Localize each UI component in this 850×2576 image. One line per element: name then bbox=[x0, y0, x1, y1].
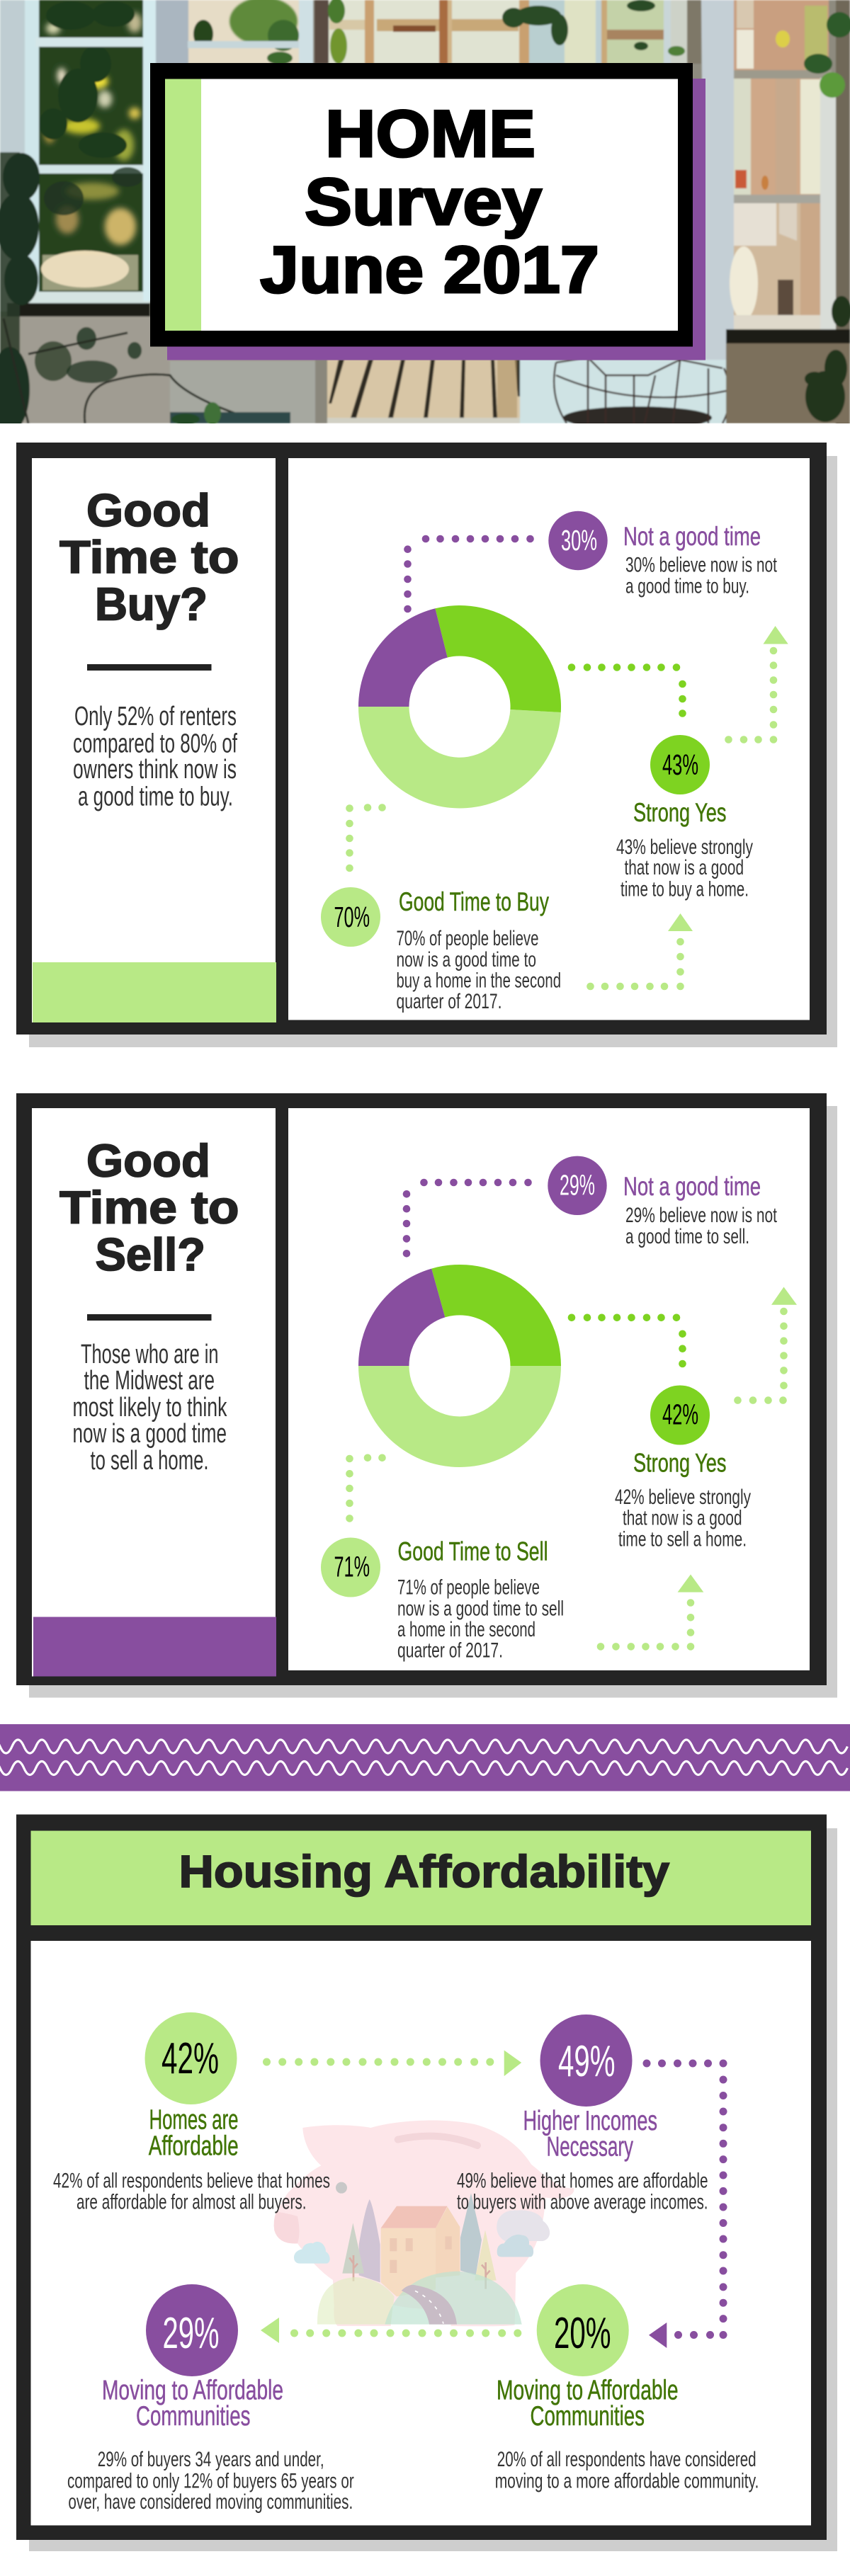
dotted connector: light green bbox=[346, 1454, 386, 1522]
stat: 43% strong yes: 43% believe strongly bbox=[616, 836, 753, 859]
stat: 49% higher incomes necessary: Necessary bbox=[547, 2132, 633, 2162]
heading: Sell? bbox=[95, 1229, 205, 1280]
stat: 43% strong yes: that now is a good bbox=[625, 856, 744, 879]
stat: 49% higher incomes necessary: 49% bbox=[558, 2037, 615, 2086]
stat: 29% moving to affordable communities bbox=[67, 2284, 354, 2514]
stat: 49% higher incomes necessary bbox=[457, 2014, 708, 2213]
stat: 30% not a good time: 30% believe now is not bbox=[625, 554, 777, 576]
stat: 29% moving to affordable communities: 29% of buyers 34 years and under, bbox=[98, 2448, 324, 2471]
stat: 42% homes are affordable: Homes are bbox=[149, 2104, 238, 2136]
side text: to sell a home. bbox=[91, 1446, 208, 1476]
stat: 30% not a good time bbox=[548, 511, 777, 598]
stat: 30% not a good time: 30% bbox=[561, 524, 597, 557]
wavy banner bbox=[0, 1724, 850, 1791]
side text: the Midwest are bbox=[84, 1366, 215, 1396]
side text: Those who are in bbox=[81, 1340, 218, 1369]
heading: Time to bbox=[60, 1181, 239, 1233]
side text: compared to 80% of bbox=[73, 729, 237, 759]
panel: Good Time to Buy bbox=[16, 443, 837, 1047]
panel shadow bbox=[29, 1106, 837, 1698]
dotted connector: dark green bbox=[568, 1314, 686, 1367]
side text bbox=[73, 702, 237, 811]
hero photo: garden house windows bbox=[0, 0, 850, 432]
right column bbox=[288, 458, 810, 1020]
arrow: upper right bbox=[725, 626, 788, 743]
stat: 70% good time to buy: buy a home in the second bbox=[397, 969, 561, 993]
stat: 29% not a good time: 29% bbox=[560, 1168, 595, 1201]
stat: 30% not a good time: a good time to buy. bbox=[625, 575, 749, 598]
title card bbox=[150, 63, 706, 360]
dotted connector: light green bbox=[346, 804, 386, 872]
right column bbox=[288, 1108, 810, 1670]
stat: 43% strong yes bbox=[616, 735, 753, 901]
title: HOME bbox=[325, 96, 536, 171]
stat: 71% good time to sell: 71% of people believe bbox=[397, 1575, 540, 1599]
stat: 49% higher incomes necessary: Higher Incomes bbox=[523, 2106, 657, 2136]
donut chart bbox=[358, 605, 561, 808]
stat: 43% strong yes: 43% bbox=[662, 748, 698, 781]
stat: 29% not a good time: Not a good time bbox=[623, 1172, 761, 1201]
heading: Time to bbox=[60, 531, 239, 583]
left column bbox=[32, 1108, 276, 1677]
stat: 71% good time to sell: a home in the second bbox=[397, 1618, 536, 1641]
panel: Housing Affordability bbox=[16, 1814, 837, 2551]
heading: Good bbox=[86, 1134, 210, 1187]
title: June 2017 bbox=[260, 232, 599, 307]
body area bbox=[31, 1941, 811, 2525]
stat: 42% strong yes: 42% bbox=[662, 1398, 698, 1430]
panel shadow bbox=[29, 456, 837, 1047]
stat: 71% good time to sell: Good Time to Sell bbox=[398, 1537, 548, 1566]
stat: 70% good time to buy: 70% of people believe bbox=[397, 927, 538, 950]
header bar bbox=[31, 1831, 811, 1925]
black frame bbox=[150, 63, 693, 347]
side text bbox=[72, 1340, 227, 1476]
stat: 70% good time to buy: Good Time to Buy bbox=[399, 887, 549, 916]
heading bbox=[60, 1134, 239, 1280]
illustration: piggy bank and house bbox=[274, 2121, 574, 2326]
side text: Only 52% of renters bbox=[74, 702, 237, 731]
dotted connector: purple bbox=[403, 1179, 532, 1258]
title: Survey bbox=[305, 164, 542, 239]
stat: 43% strong yes: time to buy a home. bbox=[620, 878, 749, 901]
stat: 42% strong yes bbox=[615, 1385, 751, 1551]
stat: 42% strong yes: time to sell a home. bbox=[618, 1527, 747, 1551]
stat: 20% moving to affordable communities bbox=[495, 2284, 759, 2492]
green footer block bbox=[33, 962, 276, 1022]
stat: 43% strong yes: Strong Yes bbox=[633, 798, 727, 827]
stat: 42% strong yes: that now is a good bbox=[623, 1507, 742, 1530]
title bbox=[260, 96, 599, 307]
stat: 29% not a good time bbox=[548, 1156, 777, 1248]
side text: most likely to think bbox=[72, 1393, 227, 1423]
stat: 29% moving to affordable communities: over, have considered moving communities. bbox=[68, 2490, 353, 2514]
stat: 20% moving to affordable communities: 20% bbox=[554, 2309, 611, 2358]
panel: Good Time to Sell bbox=[16, 1093, 837, 1698]
stat: 42% homes are affordable: 42% of all respondents believe that homes bbox=[53, 2170, 330, 2192]
stat: 29% moving to affordable communities: Moving to Affordable bbox=[102, 2375, 283, 2406]
heading bbox=[60, 484, 239, 630]
arrow: upper right bbox=[734, 1287, 797, 1404]
stat: 29% moving to affordable communities: Communities bbox=[136, 2401, 251, 2432]
purple shadow bbox=[167, 79, 706, 360]
stat: 42% homes are affordable: are affordable for almost all buyers. bbox=[76, 2191, 306, 2213]
stat: 71% good time to sell bbox=[321, 1537, 564, 1663]
side text: now is a good time bbox=[72, 1419, 227, 1449]
stat: 20% moving to affordable communities: Communities bbox=[530, 2401, 645, 2432]
heading: Buy? bbox=[95, 578, 208, 630]
stat: 29% moving to affordable communities: 29% bbox=[163, 2309, 220, 2358]
dotted connector: dark green bbox=[568, 663, 686, 717]
heading: Good bbox=[86, 484, 210, 536]
divider bbox=[87, 664, 211, 671]
arrow: 20% to 29% bbox=[261, 2318, 521, 2343]
stat: 29% moving to affordable communities: compared to only 12% of buyers 65 years or bbox=[67, 2469, 354, 2492]
divider bbox=[87, 1314, 211, 1321]
stat: 30% not a good time: Not a good time bbox=[623, 522, 761, 551]
stat: 42% strong yes: Strong Yes bbox=[633, 1449, 727, 1477]
panel shadow bbox=[29, 1828, 837, 2551]
stat: 29% not a good time: 29% believe now is not bbox=[625, 1204, 777, 1227]
arrow: 42% to 49% bbox=[263, 2051, 521, 2076]
left column bbox=[32, 458, 276, 1022]
stat: 70% good time to buy: now is a good time to bbox=[397, 948, 536, 971]
stat: 49% higher incomes necessary: to buyers with above average incomes. bbox=[457, 2191, 708, 2213]
stat: 20% moving to affordable communities: Moving to Affordable bbox=[497, 2375, 679, 2406]
dotted connector: purple bbox=[404, 535, 534, 612]
stat: 42% homes are affordable: 42% bbox=[162, 2034, 219, 2083]
arrow: lower bbox=[597, 1575, 703, 1651]
donut chart bbox=[358, 1265, 561, 1467]
section heading: Housing Affordability bbox=[178, 1846, 669, 1897]
stat: 70% good time to buy: 70% bbox=[334, 901, 370, 933]
purple footer block bbox=[33, 1617, 276, 1677]
stat: 71% good time to sell: quarter of 2017. bbox=[397, 1639, 503, 1663]
white panel bbox=[165, 79, 678, 331]
arrow: 49% to 20% bbox=[643, 2059, 727, 2348]
arrow: lower bbox=[586, 913, 693, 990]
green accent bbox=[165, 79, 201, 331]
stat: 29% not a good time: a good time to sell. bbox=[625, 1225, 749, 1248]
stat: 42% strong yes: 42% believe strongly bbox=[615, 1486, 751, 1509]
stat: 42% homes are affordable: Affordable bbox=[149, 2131, 239, 2161]
stat: 42% homes are affordable bbox=[53, 2012, 330, 2213]
stat: 70% good time to buy: quarter of 2017. bbox=[397, 990, 502, 1013]
stat: 71% good time to sell: 71% bbox=[334, 1551, 370, 1583]
stat: 70% good time to buy bbox=[321, 887, 561, 1013]
side text: owners think now is bbox=[73, 755, 237, 785]
side text: a good time to buy. bbox=[78, 782, 233, 811]
stat: 71% good time to sell: now is a good time to sell bbox=[397, 1597, 564, 1620]
stat: 49% higher incomes necessary: 49% believe that homes are affordable bbox=[457, 2170, 708, 2192]
